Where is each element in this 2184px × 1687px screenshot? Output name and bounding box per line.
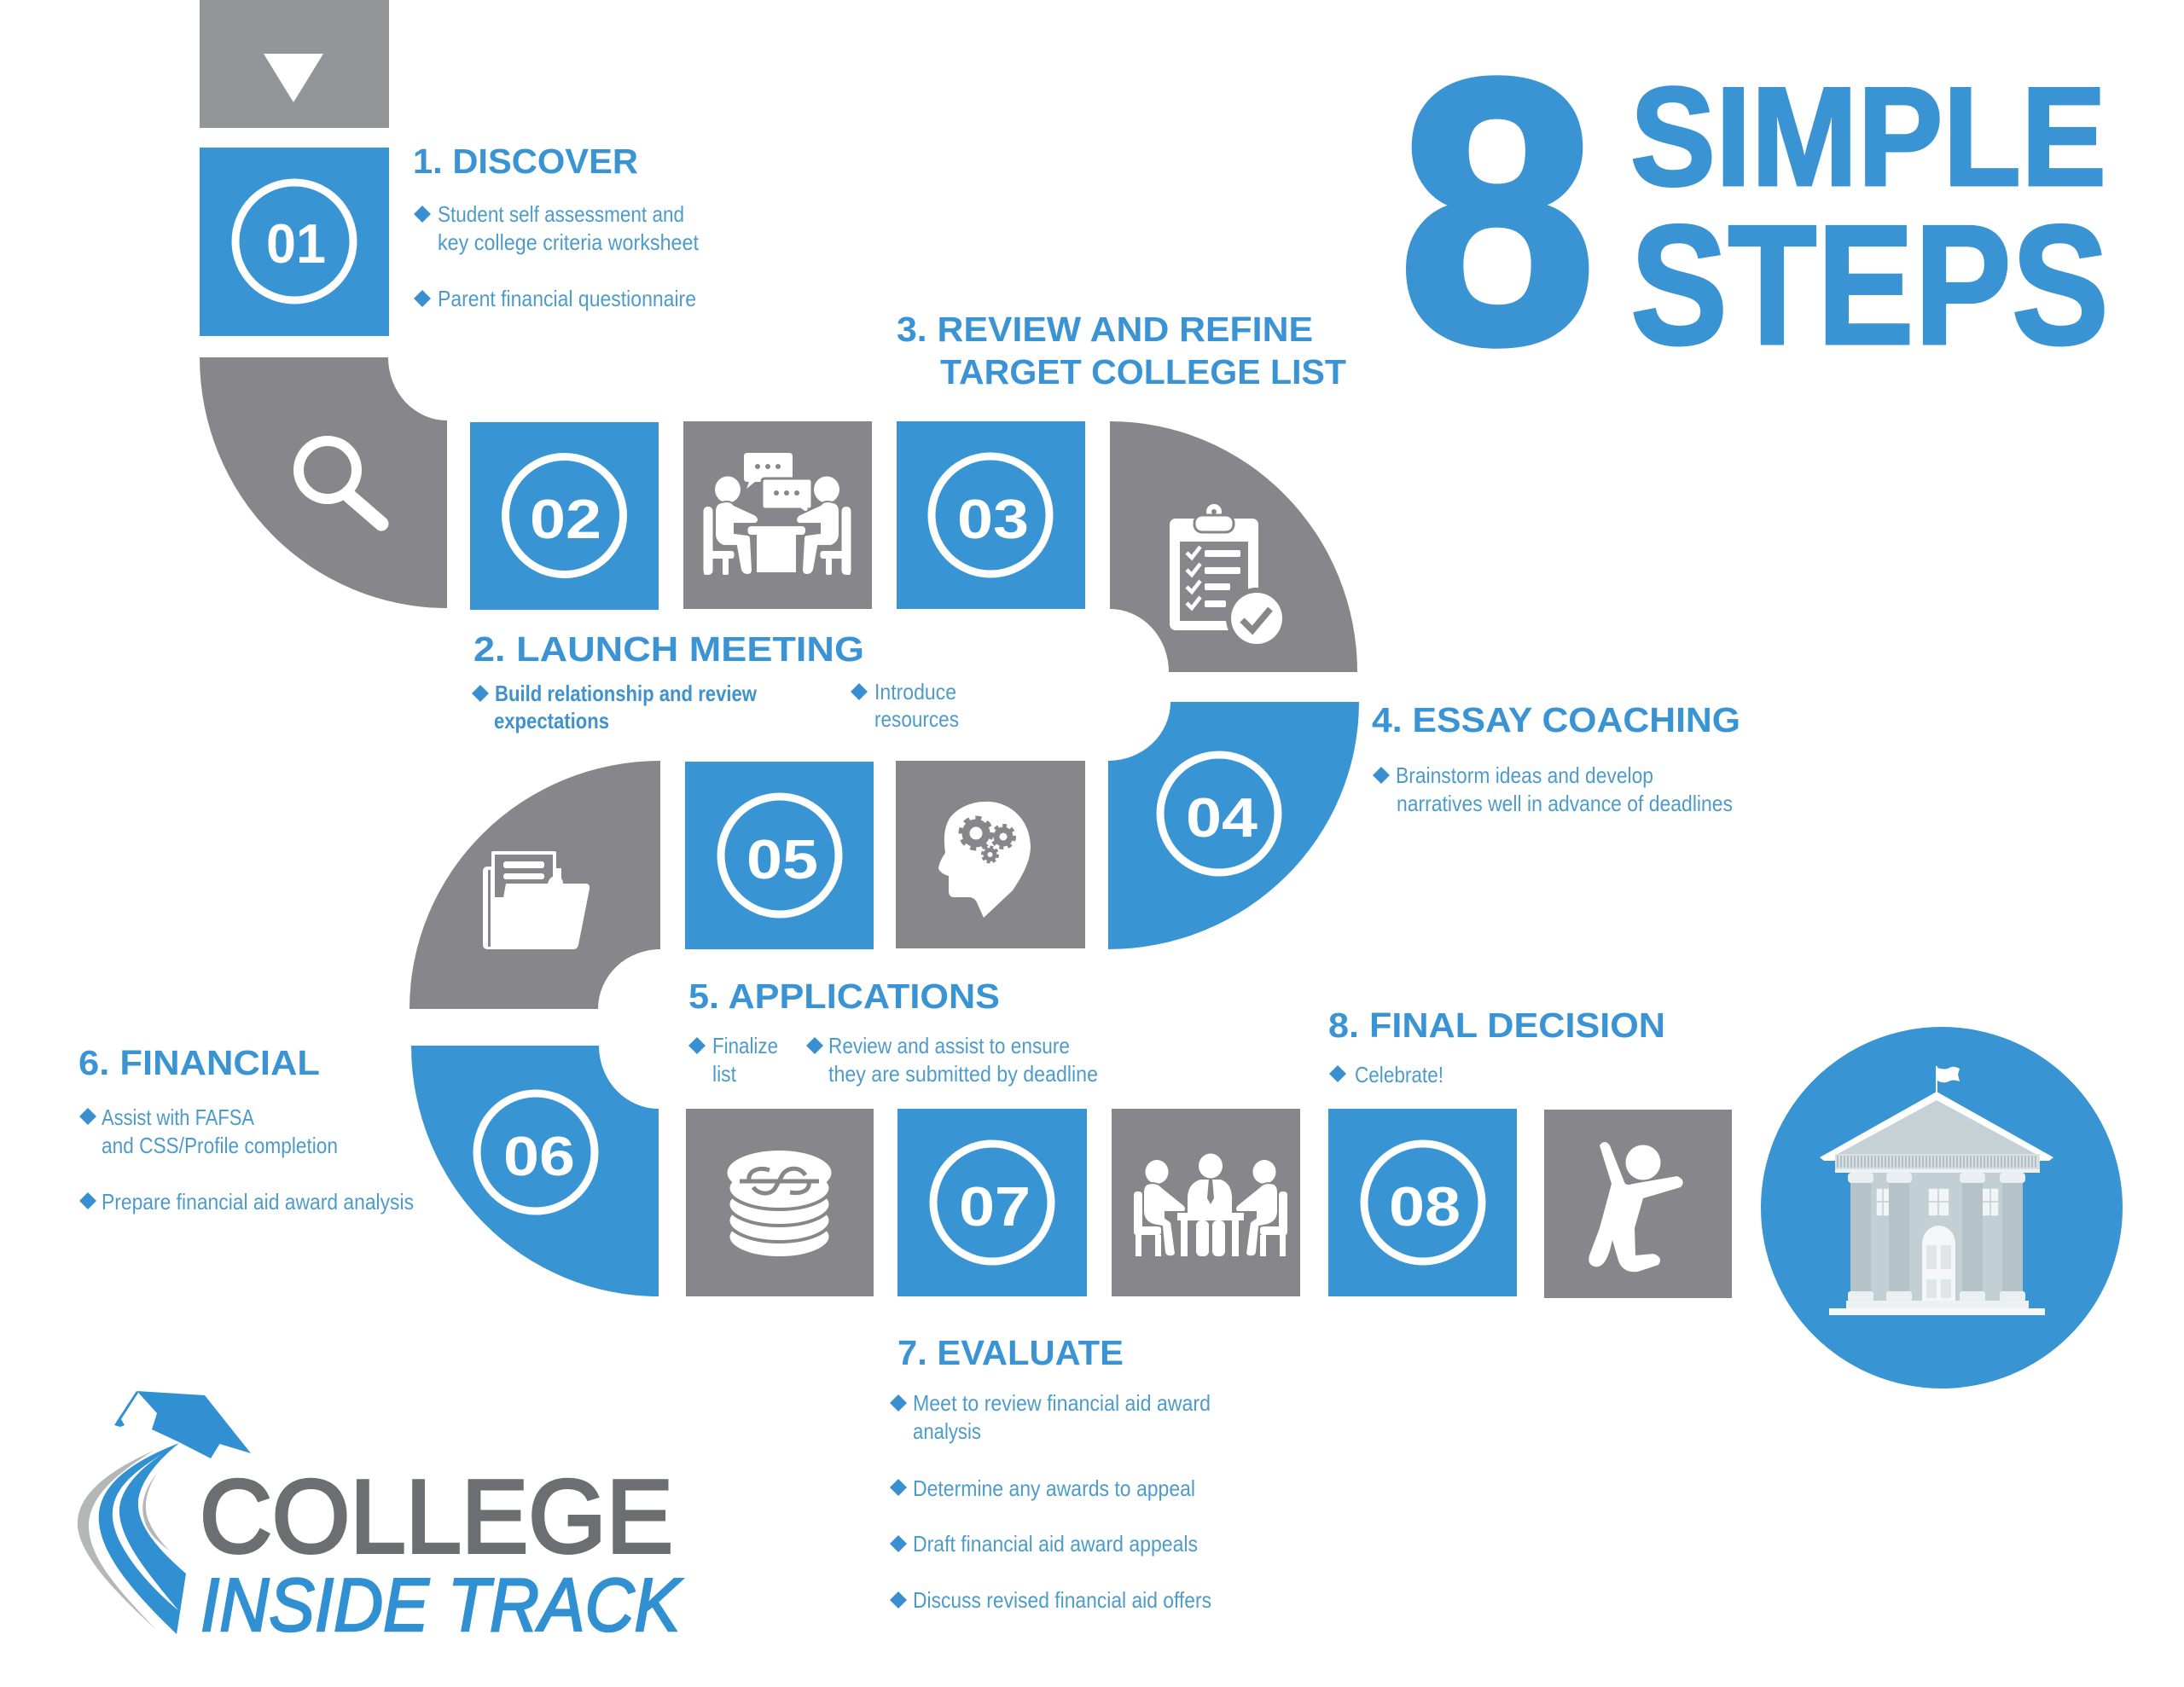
icon: jumping person — [1589, 1142, 1683, 1272]
tile 08: 08 — [1389, 1175, 1461, 1238]
tile: coin stack — [686, 1109, 874, 1296]
title: 8 simple steps — [1398, 3, 2109, 421]
bullets: they are submitted by deadline — [828, 1061, 1098, 1087]
heading: 8. FINAL DECISION — [1328, 1006, 1665, 1045]
tile 08 — [1328, 1109, 1517, 1296]
heading: 2. LAUNCH MEETING — [473, 629, 864, 669]
icon: two people talking at a table — [703, 453, 851, 575]
final circle with college building — [1761, 1027, 2123, 1388]
icon: coin stack — [727, 1151, 831, 1258]
bullets — [79, 1104, 414, 1215]
tile: jumping person — [1544, 1110, 1732, 1298]
word: steps: STEPS — [1630, 190, 2109, 380]
step 1 text: discover — [413, 142, 700, 311]
big numeral 8: 8 — [1398, 3, 1596, 421]
columns — [1861, 1181, 2013, 1292]
bullets: Parent financial questionnaire — [438, 286, 696, 311]
bullets: Discuss revised financial aid offers — [913, 1587, 1211, 1613]
heading: 7. EVALUATE — [897, 1333, 1124, 1372]
tile 03 — [897, 421, 1085, 609]
step 8 text: final decision — [1328, 1006, 1665, 1087]
tile 05: 05 — [746, 828, 818, 890]
bullets: analysis — [913, 1418, 981, 1444]
curved tile 06: 06 — [503, 1125, 575, 1187]
bullets: Brainstorm ideas and develop — [1396, 762, 1653, 788]
logo word: college: COLLEGE — [200, 1458, 673, 1574]
word: simple: SIMPLE — [1630, 58, 2106, 215]
bullets — [1373, 762, 1733, 816]
icon: checklist clipboard — [1170, 504, 1287, 649]
curved tile: clipboard — [1110, 421, 1357, 672]
heading: 5. APPLICATIONS — [688, 977, 1000, 1016]
bullets — [890, 1390, 1211, 1613]
tile 03: 03 — [957, 488, 1029, 550]
bullets: Prepare financial aid award analysis — [102, 1189, 414, 1215]
icon: magnifying glass — [299, 441, 381, 524]
bullets — [472, 679, 959, 733]
tile: two-person meeting — [683, 421, 872, 609]
bullets: Finalize — [712, 1033, 778, 1058]
curved tile 06 — [411, 1046, 659, 1296]
bullets: Introduce — [874, 679, 956, 704]
bullets: list — [712, 1061, 737, 1087]
bullets: Build relationship and review — [495, 681, 758, 706]
tile 07 — [897, 1109, 1087, 1296]
tile 07: 07 — [959, 1175, 1031, 1238]
bullets: Assist with FAFSA — [102, 1104, 255, 1130]
curved tile 04 — [1108, 702, 1359, 949]
bullets: and CSS/Profile completion — [102, 1133, 338, 1158]
tile 05 — [685, 762, 874, 949]
heading line one: 3. REVIEW AND REFINE — [897, 310, 1313, 349]
bullets: resources — [874, 706, 959, 732]
bullets — [688, 1033, 1098, 1087]
bullets: Review and assist to ensure — [828, 1033, 1070, 1058]
step 6 text: financial — [78, 1043, 414, 1215]
heading line two: TARGET COLLEGE LIST — [940, 352, 1346, 391]
step 3 text: review and refine — [897, 310, 1346, 391]
step 2 text: launch meeting — [472, 629, 959, 733]
bullets: narratives well in advance of deadlines — [1397, 791, 1733, 816]
bullets: expectations — [494, 708, 609, 733]
logo: college inside track — [78, 1391, 682, 1647]
logo words: inside track: INSIDE TRACK — [200, 1562, 682, 1647]
tile 01: 01 — [266, 212, 326, 275]
step 7 text: evaluate — [890, 1333, 1211, 1613]
tile 01 — [200, 148, 389, 336]
bullet — [1329, 1062, 1443, 1087]
icon: open folder — [483, 851, 590, 949]
bullets: key college criteria worksheet — [438, 229, 700, 255]
heading: 1. DISCOVER — [413, 142, 638, 181]
heading: 4. ESSAY COACHING — [1372, 700, 1740, 739]
bullets: Determine any awards to appeal — [913, 1475, 1195, 1501]
bullets: Meet to review financial aid award — [913, 1390, 1211, 1416]
start tile with down arrow — [200, 0, 389, 128]
flag — [1936, 1066, 1960, 1093]
curved tile 04: 04 — [1186, 786, 1258, 849]
curved tile: folder — [410, 761, 660, 1009]
windows — [1876, 1188, 1999, 1216]
tile 02 — [470, 422, 659, 610]
step 5 text: applications — [688, 977, 1098, 1087]
curved tile: magnifying glass — [200, 357, 447, 608]
icon: head with gears — [938, 802, 1031, 918]
icon: three people at a table — [1134, 1153, 1287, 1256]
bullets — [414, 201, 700, 311]
tile: head with gears — [896, 761, 1085, 948]
icon: college building — [1820, 1066, 2053, 1315]
logo mortarboard cap — [114, 1391, 251, 1458]
bullet: Celebrate! — [1355, 1062, 1443, 1087]
logo swoosh — [78, 1443, 186, 1634]
tile 02: 02 — [530, 488, 601, 550]
step 4 text: essay coaching — [1372, 700, 1740, 816]
bullets: Student self assessment and — [438, 201, 684, 227]
heading: 6. FINANCIAL — [78, 1043, 320, 1082]
tile: three-person meeting — [1112, 1109, 1300, 1296]
bullets: Draft financial aid award appeals — [913, 1531, 1198, 1557]
